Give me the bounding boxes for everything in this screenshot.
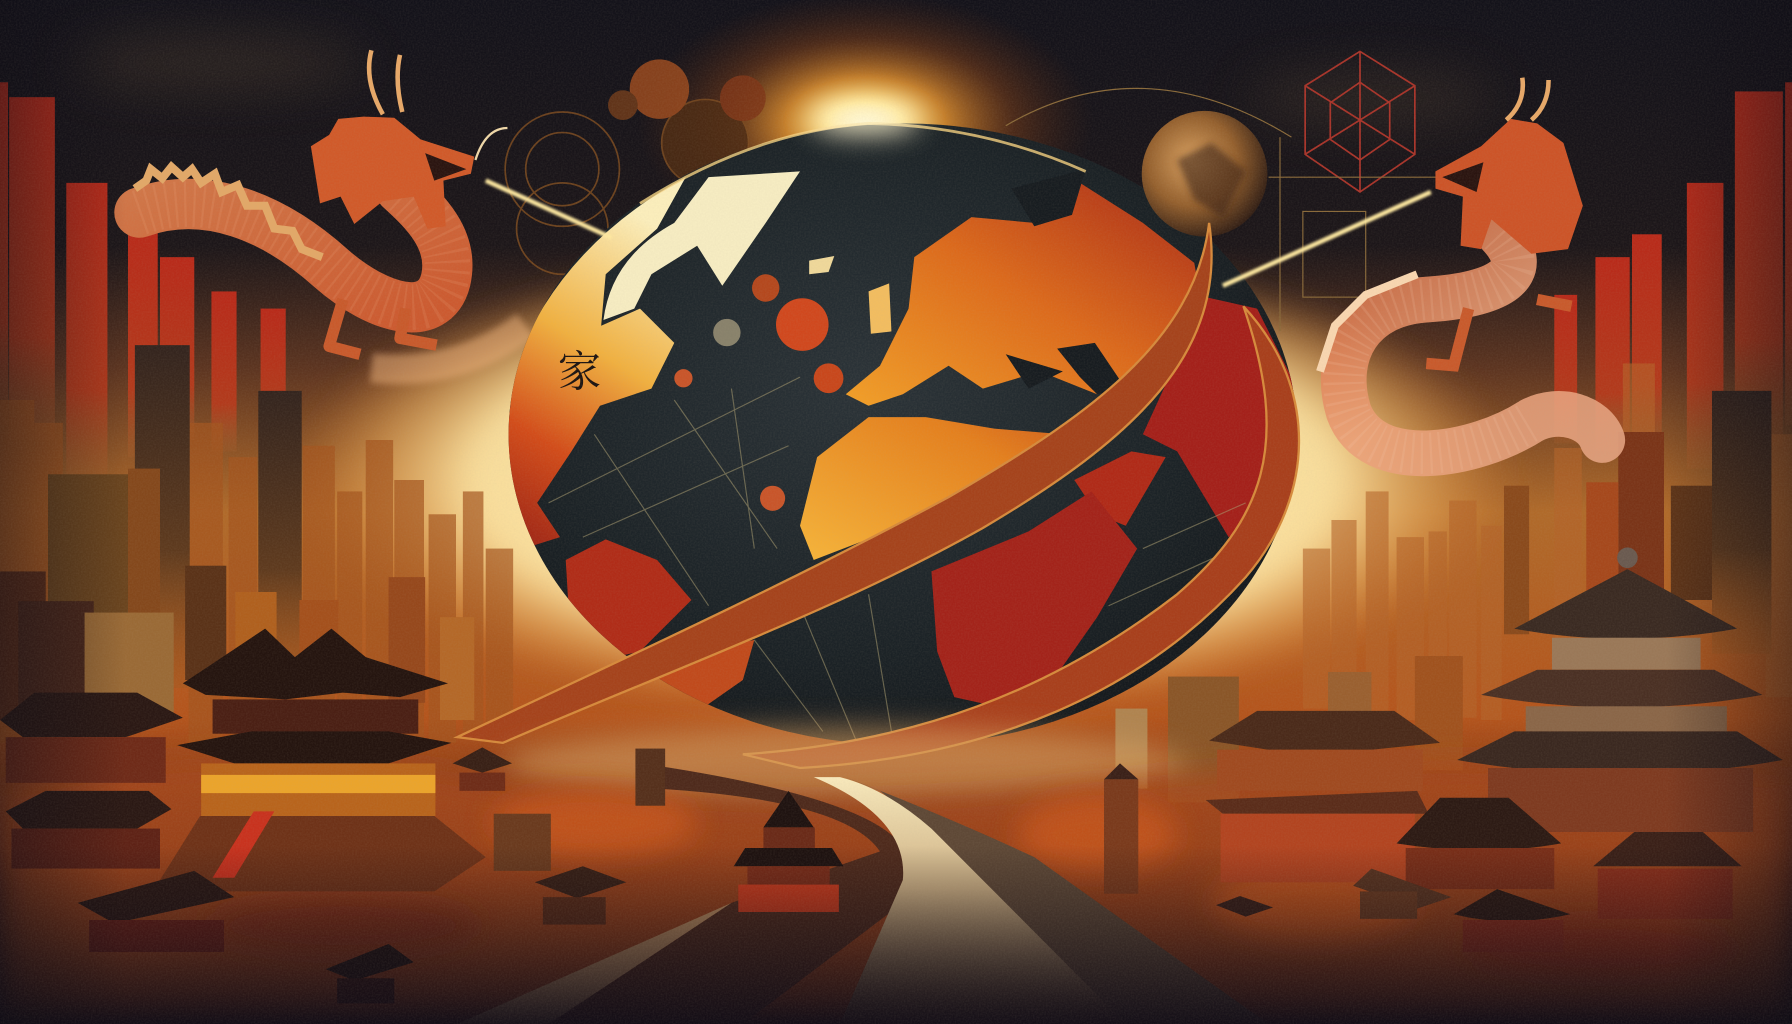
star dust right bbox=[1246, 72, 1497, 122]
wall ribbon lower bbox=[743, 306, 1299, 768]
dragon body left bbox=[139, 189, 447, 307]
Europe landmass bbox=[846, 183, 1202, 406]
light beam right bbox=[1223, 192, 1431, 286]
North Africa landmass bbox=[800, 417, 1050, 560]
brush calligraphy on globe: 家 bbox=[558, 348, 601, 396]
sun core over globe top bbox=[810, 104, 920, 134]
dragon legs right bbox=[1426, 299, 1571, 366]
dragon: right bbox=[1320, 78, 1602, 453]
ground orange patches bbox=[206, 789, 1737, 977]
skyline right near bbox=[1115, 391, 1771, 802]
palace right bbox=[1206, 711, 1440, 882]
pagoda center bbox=[734, 791, 843, 912]
dragon body right bbox=[1344, 234, 1602, 453]
geometric line drawing right bbox=[1006, 51, 1486, 331]
map grid lines bbox=[549, 377, 1246, 743]
dragon spines right bbox=[1320, 274, 1417, 371]
dragon head left bbox=[311, 117, 474, 229]
skyline right far bbox=[1303, 363, 1792, 726]
northern dark sea bbox=[1012, 182, 1082, 226]
temple of heaven right bbox=[1457, 547, 1783, 832]
dragon whisker left bbox=[475, 128, 507, 160]
ground terrain bbox=[0, 757, 1792, 1024]
British Isles bbox=[869, 283, 891, 334]
red banners left bbox=[0, 82, 286, 480]
dragon mouth right bbox=[1442, 162, 1483, 192]
white landmass north bbox=[603, 171, 800, 320]
light beam left bbox=[486, 181, 611, 238]
dragon tail fade left bbox=[371, 326, 526, 369]
road lower left surface bbox=[457, 903, 731, 1024]
bottom vignette bbox=[0, 846, 1792, 1024]
globe sphere bbox=[509, 123, 1297, 745]
sun glow above globe bbox=[637, 0, 1094, 255]
dragon scales right bbox=[1344, 234, 1531, 453]
dark sea patches bbox=[1006, 343, 1126, 394]
road wall right bbox=[840, 775, 1269, 1024]
wall ribbon around globe front bbox=[457, 223, 1212, 743]
cream landmass west bbox=[503, 177, 686, 549]
red landmass east bbox=[1143, 297, 1297, 537]
dragon legs left bbox=[329, 299, 437, 354]
road surface bbox=[814, 777, 1126, 1024]
skyline left far bbox=[0, 400, 513, 743]
mist under globe bbox=[503, 727, 1189, 805]
dragon scales left bbox=[139, 189, 447, 307]
ornamental medallions behind globe bbox=[505, 59, 766, 274]
left vignette bbox=[0, 0, 126, 1024]
dragon head right bbox=[1435, 119, 1583, 254]
palace left main bbox=[160, 629, 486, 891]
dragon spines left bbox=[135, 167, 322, 257]
right vignette bbox=[1666, 0, 1792, 1024]
South America red bbox=[566, 539, 691, 663]
dragon: left bbox=[135, 50, 526, 369]
skyline left near bbox=[0, 345, 474, 720]
map markers bbox=[674, 274, 843, 511]
lower South America bbox=[660, 640, 754, 704]
dragon mouth left bbox=[425, 153, 466, 181]
star dust left bbox=[69, 38, 366, 88]
dragon horns right bbox=[1506, 78, 1549, 120]
great wall road bbox=[457, 766, 1269, 1024]
Arabia red bbox=[1074, 451, 1166, 526]
red banners right bbox=[1554, 82, 1792, 469]
dragon horns left bbox=[369, 50, 402, 114]
road wall left bbox=[549, 766, 905, 1024]
globe bbox=[503, 123, 1297, 745]
South Africa red bbox=[931, 491, 1137, 709]
globe rim light bbox=[640, 123, 1086, 203]
small white island bbox=[809, 256, 834, 274]
glow behind globe bbox=[286, 240, 1520, 720]
planet bbox=[1142, 111, 1267, 237]
palace left small bbox=[0, 693, 665, 1003]
small pavilions right bbox=[1104, 763, 1742, 952]
